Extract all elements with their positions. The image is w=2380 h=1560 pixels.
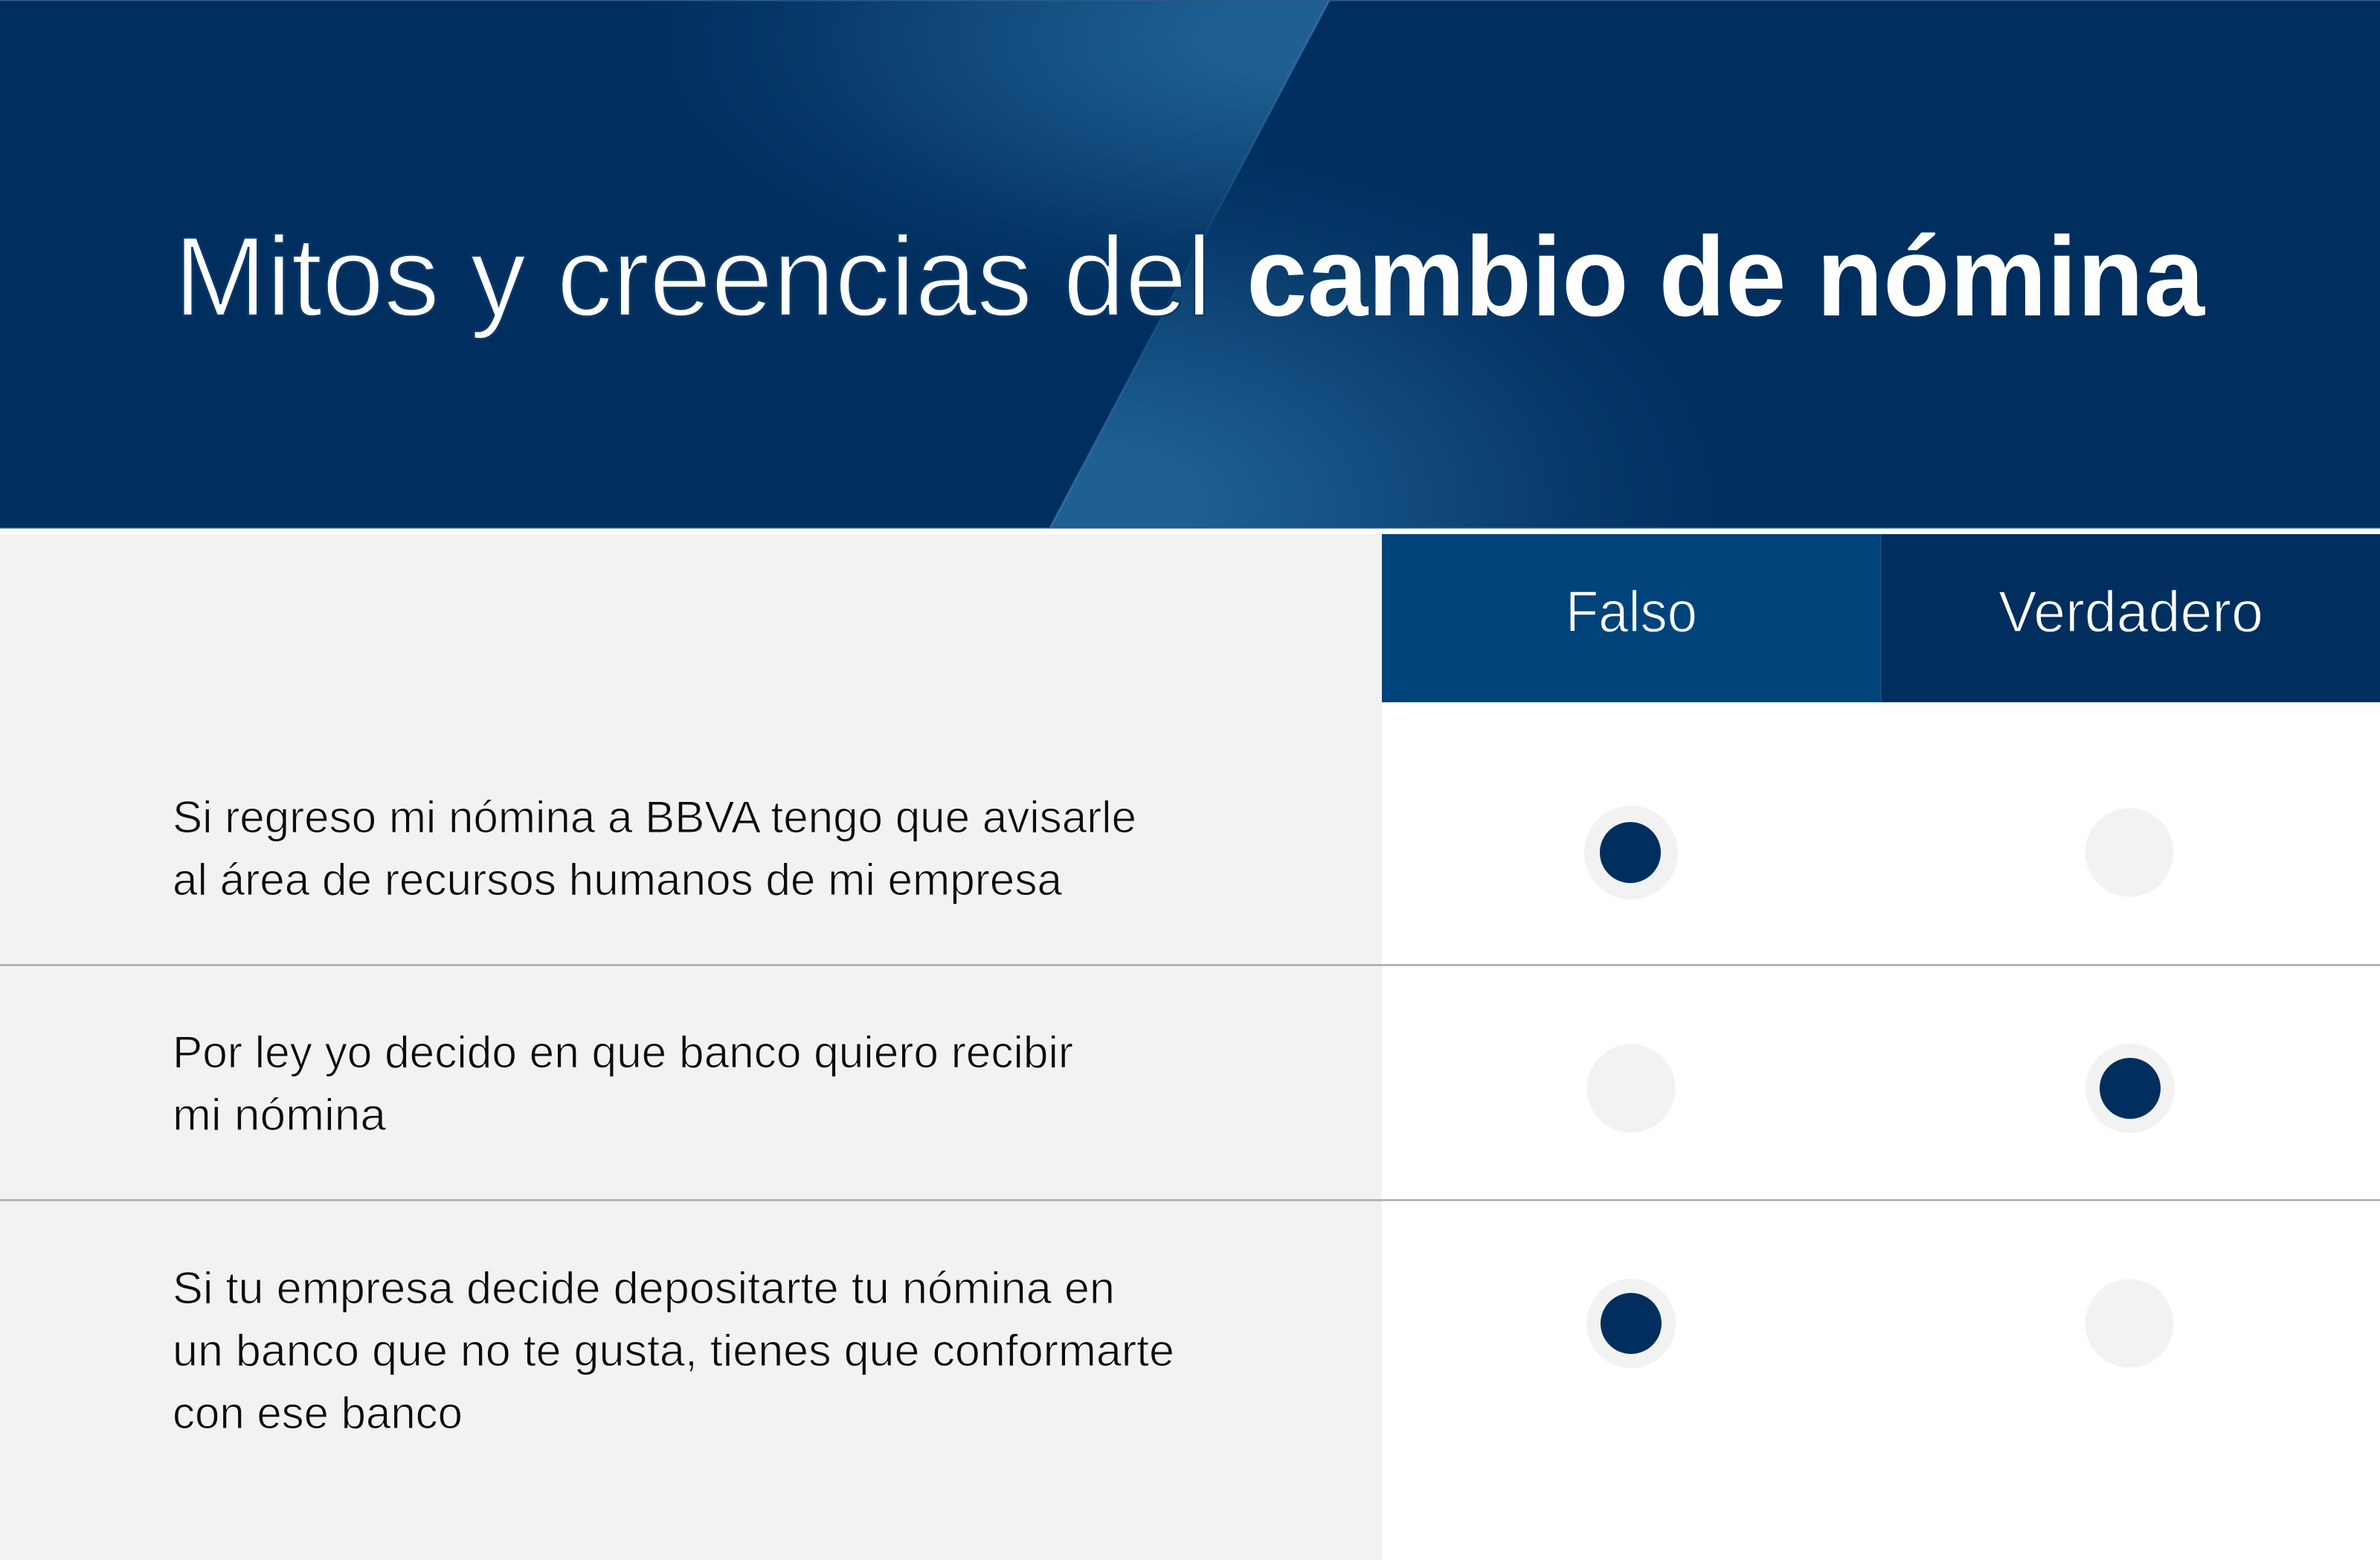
radio: question 2 Falso empty <box>1587 1044 1675 1132</box>
question 1 text: Si regreso mi nómina a BBVA tengo que avisarle <box>173 792 1136 842</box>
panel: questions column <box>0 534 1382 1560</box>
radio: question 1 Falso selected <box>1584 806 1678 899</box>
column header: Verdadero <box>1880 534 2380 702</box>
title <box>174 214 2205 340</box>
question 2 text <box>173 1027 1073 1140</box>
question 3 text: con ese banco <box>173 1388 463 1438</box>
title: Mitos y creencias del <box>174 214 1212 340</box>
title: cambio de nómina <box>1247 214 2205 340</box>
question 3 text <box>173 1263 1174 1438</box>
radio: question 2 Verdadero selected <box>2085 1044 2175 1133</box>
column header: Falso <box>1382 534 1880 702</box>
radio: question 1 Verdadero empty <box>2085 808 2173 897</box>
column header: Falso: Falso <box>1566 579 1697 644</box>
question 2 text: mi nómina <box>173 1090 387 1140</box>
radio: question 3 Verdadero empty <box>2085 1280 2173 1367</box>
header banner <box>0 0 2380 528</box>
question 2 text: Por ley yo decido en que banco quiero recibir <box>173 1027 1073 1077</box>
column header: Verdadero: Verdadero <box>1998 579 2263 644</box>
question 3 text: Si tu empresa decide depositarte tu nómina en <box>173 1263 1115 1313</box>
radio: question 3 Falso selected <box>1586 1279 1676 1368</box>
question 3 text: un banco que no te gusta, tienes que conformarte <box>173 1326 1174 1376</box>
question 1 text <box>173 792 1136 905</box>
question 1 text: al área de recursos humanos de mi empresa <box>173 855 1063 905</box>
